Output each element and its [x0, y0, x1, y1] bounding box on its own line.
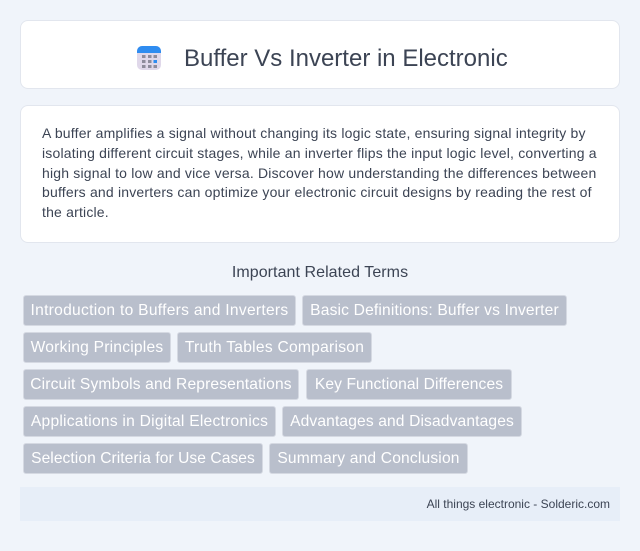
chip: Truth Tables Comparison	[185, 339, 364, 356]
chip: Working Principles	[31, 339, 163, 356]
chip	[177, 332, 372, 363]
chip	[306, 369, 512, 400]
chip	[23, 332, 171, 363]
chip	[23, 443, 263, 474]
chip: Introduction to Buffers and Inverters	[30, 302, 288, 319]
chip	[302, 295, 567, 326]
chip	[23, 369, 299, 400]
intro paragraph: isolating different circuit stages, while an inverter flips the input logic level, converting a	[42, 145, 597, 161]
chip	[23, 295, 296, 326]
title: Buffer Vs Inverter in Electronic	[184, 45, 508, 72]
chip: Applications in Digital Electronics	[31, 413, 268, 430]
chip	[23, 406, 276, 437]
intro paragraph: high signal to low and vice versa. Discover how understanding the differences between	[42, 165, 596, 181]
chip: Summary and Conclusion	[277, 450, 460, 467]
footer credit: All things electronic - Solderic.com	[427, 497, 610, 511]
heading: important related terms: Important Related Terms	[232, 264, 408, 281]
chip	[269, 443, 468, 474]
intro paragraph: buffers and inverters can optimize your electronic circuit designs by reading the rest of	[42, 184, 592, 200]
chip: Selection Criteria for Use Cases	[31, 450, 255, 467]
chip: Key Functional Differences	[315, 376, 503, 393]
footer	[20, 487, 620, 521]
intro paragraph: the article.	[42, 204, 109, 220]
chip: Circuit Symbols and Representations	[30, 376, 292, 393]
chip: Advantages and Disadvantages	[290, 413, 514, 430]
chip	[282, 406, 522, 437]
panel: header	[20, 20, 620, 89]
panel: intro text	[20, 105, 620, 243]
intro paragraph	[42, 125, 597, 220]
intro paragraph: A buffer amplifies a signal without changing its logic state, ensuring signal integrity by	[42, 125, 586, 141]
chips: related terms	[23, 295, 567, 474]
icon: calendar	[137, 46, 161, 70]
chip: Basic Definitions: Buffer vs Inverter	[310, 302, 559, 319]
